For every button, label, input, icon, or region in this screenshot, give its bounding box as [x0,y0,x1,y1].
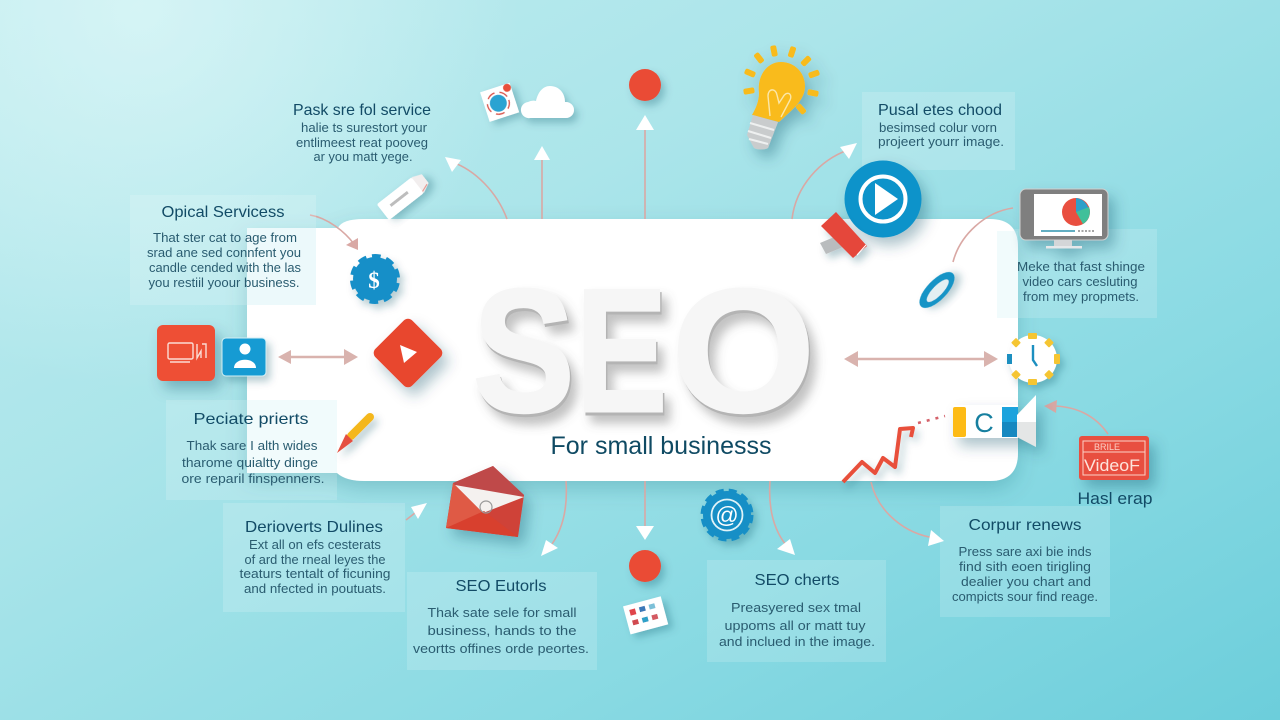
panel: Opical Services: candle cended with the las [149,261,301,275]
panel: Opical Services: you restiil yoour business. [148,276,300,290]
panel: Make that: Meke that fast shinge [1017,260,1145,274]
panel: Peciate: Peciate prierts [194,411,308,428]
panel: Corpur renews: dealier you chart and [961,575,1091,589]
icon: clock [1007,333,1060,385]
icon: at-sign gear: @ [715,502,739,528]
panel: Derioverts: and nfected in poutuats. [244,582,386,596]
curved arrow to service text [445,157,507,219]
panel: Pusal: Pusal etes chood [878,102,1002,119]
title: SEO: E [576,254,667,449]
icon: rising red chart line [843,416,945,482]
label: Hasl erap: Hasl erap [1078,489,1152,508]
panel: Opical Services [130,195,316,305]
panel: SEO Eutorls [407,572,597,670]
panel: SEO charts: SEO cherts [754,572,840,589]
panel: central white card [247,219,1018,481]
icon: red dot bottom [629,550,661,582]
panel: Peciate: ore reparil finspenners. [182,472,324,486]
panel: Corpur renews: find sith eoen tirigling [959,560,1091,574]
icon: pencil [337,417,370,453]
icon: dollar gear [349,253,401,305]
icon: USB pen [377,171,432,220]
icon: at-sign gear [702,490,752,540]
icon: blue user square [222,338,266,376]
title: SEO: S [473,253,575,448]
panel: Opical Services: Opical Servicess [162,204,284,221]
panel: Make that: from mey propmets. [1023,290,1139,304]
panel: Corpur renews: Corpur renews [968,517,1082,534]
panel: SEO charts: uppoms all or matt tuy [724,619,866,633]
arrow down to red dot [636,481,654,540]
double arrow left [278,349,358,365]
arrow up to cloud [534,146,550,219]
panel: Opical Services: That ster cat to age from [153,231,297,245]
panel: Peciate: tharome quialtty dinge [182,456,318,470]
title: SEO: O [672,254,815,449]
panel: Derioverts [223,503,405,612]
icon: light bulb [743,45,820,149]
icon: envelope [446,466,524,537]
arrow up to red dot [636,115,654,219]
icon: blue oval clip [914,267,960,313]
panel: Peciate [166,400,337,500]
panel: Derioverts: Derioverts Dulines [245,519,383,536]
panel: Pusal [862,92,1015,170]
icon: red diamond play [371,316,445,390]
icon: red video badge: VideoF [1084,456,1140,475]
curved arrow down to tutorials [541,481,566,556]
panel: Derioverts: of ard the rneal leyes the [244,553,386,567]
icon: red tool [820,212,867,258]
icon: video camera: C [974,408,994,438]
curved arrow down to charts [770,481,795,555]
icon: monitor with pie chart [1020,189,1108,248]
icon: cloud [521,86,574,118]
panel: Corpur renews: Press sare axi bie inds [958,545,1092,559]
panel: Make that: video cars cesluting [1022,275,1138,289]
icon: red video badge [1079,436,1149,480]
panel: SEO charts [707,560,886,662]
curved arrow from monitor [953,208,1013,262]
panel: Corpur renews [940,506,1110,617]
panel: SEO Eutorls: SEO Eutorls [456,578,546,595]
icon: grid sticker [623,596,668,634]
panel: SEO Eutorls: Thak sate sele for small [428,606,576,620]
text block: Pask: Pask sre fol service [293,102,431,119]
icon: photo sticker [480,83,519,122]
panel: Pusal: besimsed colur vorn [879,121,997,135]
panel: SEO Eutorls: business, hands to the [428,624,577,638]
curved arrow to play text [792,143,857,219]
curved arrow to gear [310,215,358,250]
panel: SEO charts: and inclued in the image. [719,635,875,649]
panel: Make that [997,229,1157,318]
icon: play button [844,160,922,238]
small arrow to envelope [406,503,427,520]
curved arrow to renews [871,482,944,546]
panel: Derioverts: teaturs tentalt of ficuning [240,567,391,581]
icon: red video square [157,325,215,381]
panel: Corpur renews: compicts sour find reage. [952,590,1098,604]
text block: Pask: halie ts surestort your [301,121,427,135]
panel: Opical Services: srad ane sed connfent you [147,246,301,260]
icon: video camera [953,395,1036,447]
panel: SEO Eutorls: veortts offines orde peortes. [413,642,589,656]
text block: Pask: entlimeest reat pooveg [296,136,428,150]
text block: Pask: ar you matt yege. [314,150,412,164]
subtitle: For small businesss [550,432,772,460]
panel: Pusal: projeert yourr image. [878,135,1004,149]
icon: red video badge: BRILE [1094,442,1120,452]
panel: SEO charts: Preasyered sex tmal [731,601,861,615]
curved arrow to camera [1044,400,1108,434]
title: SEO [473,253,815,449]
panel: Peciate: Thak sare I alth wides [186,439,318,453]
text block: Pask [293,102,431,164]
icon: dollar gear: $ [368,268,380,293]
panel: Derioverts: Ext all on efs cesterats [249,538,381,552]
icon: red dot top [629,69,661,101]
double arrow right [844,351,998,367]
